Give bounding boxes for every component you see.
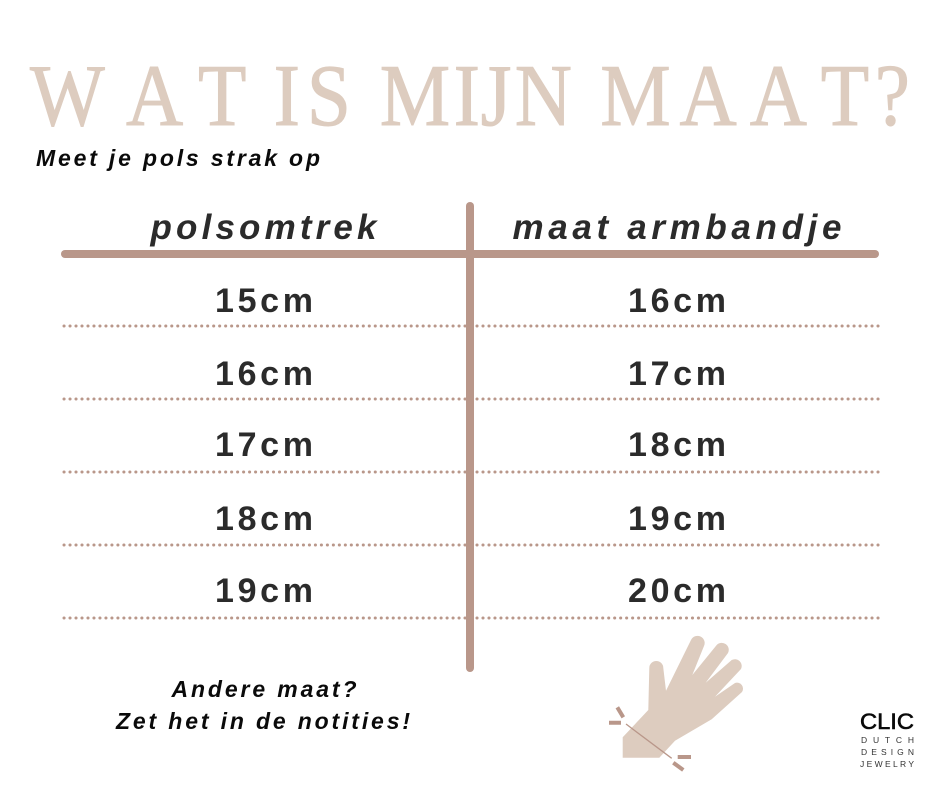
note: Andere maat? xyxy=(170,676,356,702)
row 2: 17cm xyxy=(628,355,726,393)
row 3 xyxy=(64,426,878,472)
logo: CLIC Dutch Design Jewelry: JEWELRY xyxy=(860,759,914,769)
row 3: 18cm xyxy=(628,426,726,464)
table xyxy=(61,202,879,672)
icon: hand with wrist measurement xyxy=(609,636,743,770)
header rule xyxy=(61,250,879,258)
note: Zet het in de notities! xyxy=(115,708,410,734)
row 5 xyxy=(64,572,878,618)
row 5: 20cm xyxy=(628,572,726,610)
row 1 xyxy=(64,282,878,326)
note xyxy=(115,676,410,734)
row 1: 16cm xyxy=(628,282,726,320)
logo: CLIC Dutch Design Jewelry xyxy=(860,709,914,769)
row 5: 19cm xyxy=(215,572,313,610)
row 2: 16cm xyxy=(215,355,313,393)
logo: CLIC Dutch Design Jewelry: CLIC xyxy=(860,709,914,734)
row 3: 17cm xyxy=(215,426,313,464)
subtitle: Meet je pols strak op xyxy=(36,145,320,171)
row 4: 18cm xyxy=(215,500,313,538)
column divider xyxy=(466,202,474,672)
row 4: 19cm xyxy=(628,500,726,538)
title: WATISMIJNMAAT? xyxy=(30,47,910,145)
column heading: polsomtrek: polsomtrek xyxy=(150,208,378,247)
row 2 xyxy=(64,355,878,399)
row 4 xyxy=(64,500,878,545)
row 1: 15cm xyxy=(215,282,313,320)
logo: CLIC Dutch Design Jewelry: DESIGN xyxy=(861,747,914,757)
column heading: maat armbandje: maat armbandje xyxy=(512,208,842,247)
logo: CLIC Dutch Design Jewelry: DUTCH xyxy=(861,735,914,745)
